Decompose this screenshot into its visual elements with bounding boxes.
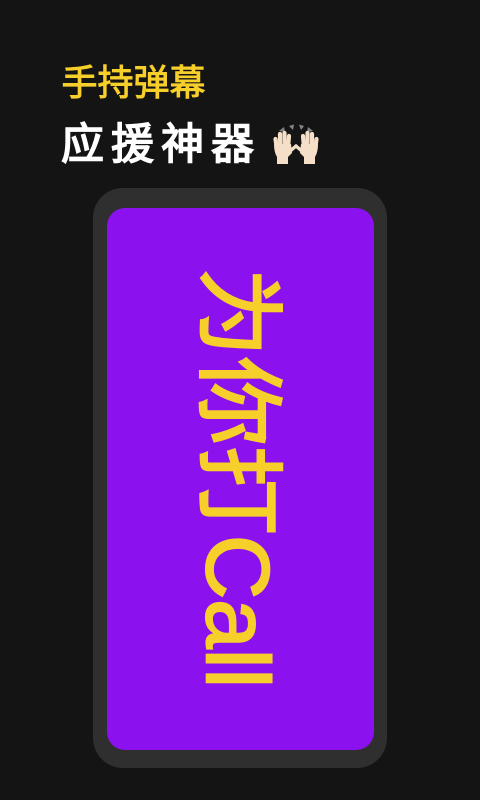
rotated danmaku text: 为你打Call	[188, 268, 288, 688]
panel: phone frame	[93, 188, 387, 768]
panel: purple phone screen	[107, 208, 374, 750]
subtitle: handheld danmaku: 手持弹幕	[62, 62, 206, 103]
title: cheering tool: 应援神器	[61, 121, 261, 169]
icon: raised hands emoji	[273, 124, 319, 164]
